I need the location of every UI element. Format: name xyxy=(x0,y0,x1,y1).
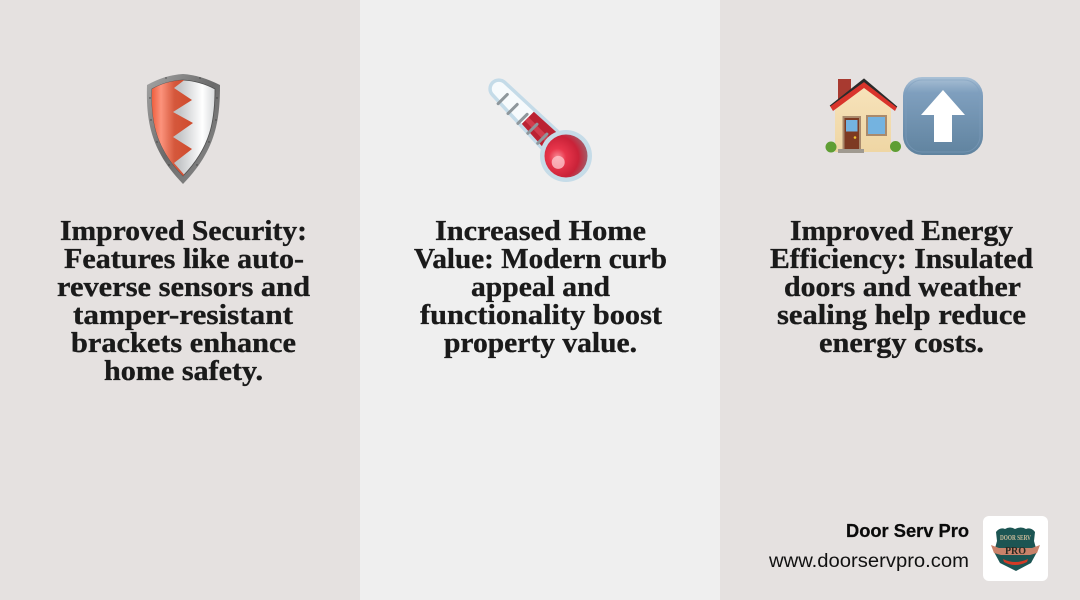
icon: thermometer xyxy=(473,63,603,193)
heading: improved energy efficiency text: Efficiency: Insulated xyxy=(770,243,1033,275)
brand name: Door Serv Pro xyxy=(846,521,969,541)
heading: improved security text: brackets enhance xyxy=(71,327,296,359)
heading: improved energy efficiency text: doors and weather xyxy=(784,271,1021,303)
heading: increased home value text: functionality boost xyxy=(420,299,662,331)
panel: improved security xyxy=(58,74,310,386)
website url: www.doorservpro.com xyxy=(768,550,969,572)
heading: improved security text: reverse sensors and xyxy=(57,271,310,303)
icon: shield xyxy=(140,74,220,184)
heading: increased home value text: Increased Home xyxy=(435,215,646,247)
heading: improved security text: home safety. xyxy=(104,355,263,387)
heading: improved security text: tamper-resistant xyxy=(73,299,293,331)
heading: increased home value text xyxy=(414,215,667,359)
heading: improved security text xyxy=(57,215,310,387)
logo badge: DOOR SERV xyxy=(1000,534,1031,542)
icon: up arrow xyxy=(903,77,983,155)
icon: house xyxy=(826,79,901,153)
panel: increased home value xyxy=(360,0,720,600)
heading: improved security text: Improved Security: xyxy=(60,215,307,247)
heading: improved energy efficiency text: Improved Energy xyxy=(790,215,1014,247)
logo badge: PRO xyxy=(1005,546,1026,557)
heading: increased home value text: appeal and xyxy=(471,271,610,303)
heading: improved energy efficiency text xyxy=(770,215,1033,359)
heading: increased home value text: Value: Modern curb xyxy=(414,243,667,275)
panel: improved energy efficiency xyxy=(720,0,1080,600)
heading: improved energy efficiency text: sealing help reduce xyxy=(777,299,1026,331)
heading: improved energy efficiency text: energy costs. xyxy=(819,327,984,359)
logo badge xyxy=(983,516,1048,581)
heading: improved security text: Features like auto- xyxy=(64,243,304,275)
heading: increased home value text: property value. xyxy=(444,327,637,359)
